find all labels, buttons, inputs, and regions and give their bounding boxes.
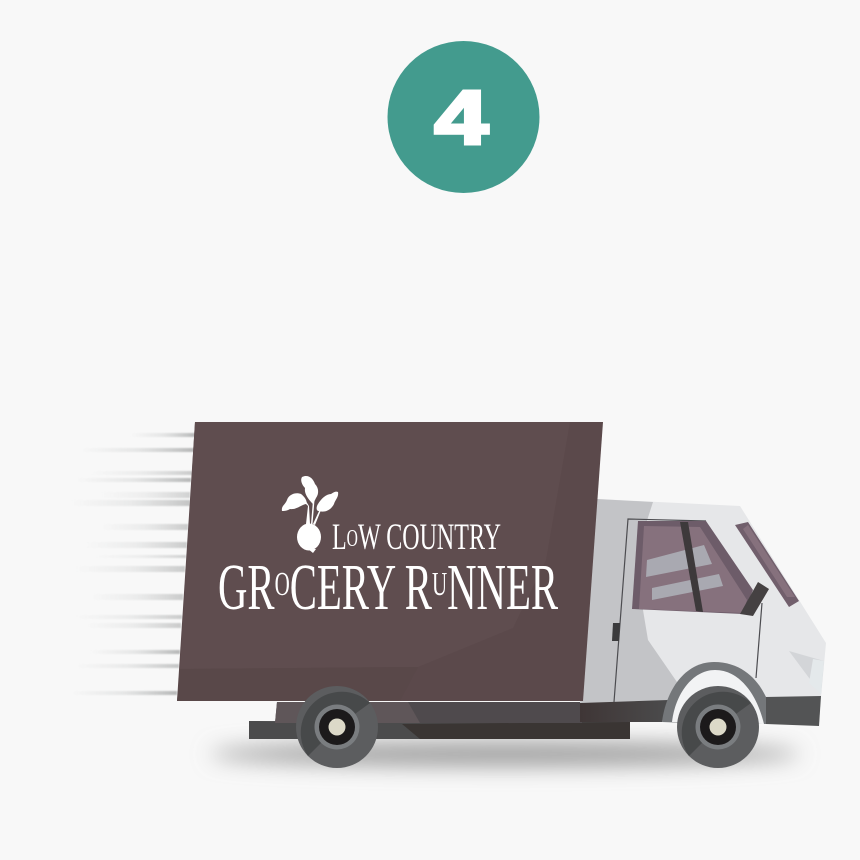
ground shadow xyxy=(210,742,800,766)
lower cab band xyxy=(580,700,668,722)
logo text: Grocery Runner: GR xyxy=(218,551,310,624)
company logo xyxy=(218,476,558,624)
truck xyxy=(177,422,826,768)
logo text: Grocery Runner: U xyxy=(432,566,447,603)
logo text: Grocery Runner: NNER xyxy=(447,551,558,624)
headlight xyxy=(789,651,824,694)
logo text: Grocery Runner: O xyxy=(275,566,290,603)
chassis xyxy=(249,702,630,739)
door lines xyxy=(614,519,762,702)
mirror xyxy=(740,582,769,616)
window pillar xyxy=(680,522,703,612)
rear wheel xyxy=(296,686,378,768)
front wheel xyxy=(677,686,759,768)
icon: beet xyxy=(282,476,338,553)
side window xyxy=(632,521,753,614)
logo text: Low Country: W COUNTRY xyxy=(358,517,501,558)
wheel arch xyxy=(662,662,766,724)
logo text: Grocery Runner: CERY R xyxy=(290,551,432,624)
step number badge xyxy=(388,41,540,193)
logo text: Low Country: L xyxy=(332,517,355,558)
number 4: 4 xyxy=(434,75,488,160)
speed lines xyxy=(70,433,195,695)
door handle xyxy=(612,623,620,641)
cab xyxy=(580,499,826,726)
windshield xyxy=(735,522,799,607)
cargo box xyxy=(177,422,603,701)
logo text: Low Country: O xyxy=(347,526,358,552)
